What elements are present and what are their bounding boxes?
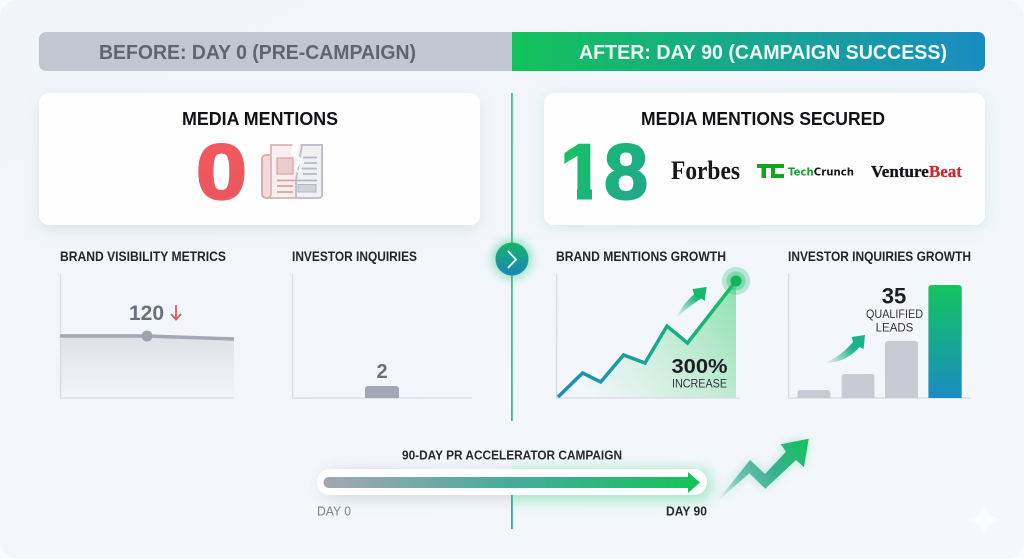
- heading: after: AFTER: DAY 90 (CAMPAIGN SUCCESS): [579, 42, 947, 64]
- icon: torn newspaper: [262, 144, 322, 198]
- label increase: INCREASE: [672, 376, 727, 390]
- label qualified leads: LEADS: [876, 322, 914, 334]
- chart heading: BRAND MENTIONS GROWTH: [556, 249, 726, 264]
- label day 90: DAY 90: [666, 504, 707, 518]
- big number zero: 0: [196, 128, 247, 216]
- arrow: rising zigzag: [717, 439, 809, 502]
- logo: Forbes: Forbes: [671, 156, 740, 185]
- heading: after: [512, 32, 985, 71]
- chart: brand mentions growth: [556, 249, 750, 398]
- icon: down arrow: [171, 305, 181, 320]
- panel: media mentions after: [544, 93, 985, 225]
- value 120: 120: [129, 302, 164, 325]
- chart: brand visibility metrics: [60, 249, 234, 398]
- arrow: leads growth: [824, 335, 865, 363]
- heading: before: BEFORE: DAY 0 (PRE-CAMPAIGN): [99, 42, 416, 64]
- chart: investor inquiries growth: [788, 249, 971, 398]
- logo: TechCrunch: [757, 164, 854, 178]
- heading: before: [39, 32, 512, 71]
- card heading: MEDIA MENTIONS: [182, 109, 338, 129]
- chart: investor inquiries: [292, 249, 472, 398]
- center divider line: [511, 93, 513, 421]
- icon: sparkle watermark: [965, 502, 1002, 537]
- chart heading: BRAND VISIBILITY METRICS: [60, 249, 226, 264]
- chart heading: INVESTOR INQUIRIES GROWTH: [788, 249, 971, 264]
- card heading: MEDIA MENTIONS SECURED: [641, 109, 885, 129]
- label qualified leads: QUALIFIED: [866, 309, 923, 321]
- bar: [365, 386, 399, 398]
- value 2: 2: [376, 361, 388, 383]
- value 35: 35: [882, 284, 906, 308]
- logo: TechCrunch: TechCrunch: [788, 166, 854, 178]
- chart heading: INVESTOR INQUIRIES: [292, 249, 417, 264]
- arrow: timeline progress: [324, 472, 700, 493]
- campaign timeline: [317, 448, 712, 529]
- panel: media mentions before: [39, 93, 480, 225]
- timeline heading: 90-DAY PR ACCELERATOR CAMPAIGN: [402, 448, 622, 462]
- peak marker: [722, 267, 750, 295]
- bars: [798, 285, 962, 398]
- arrow: growth: [676, 287, 707, 318]
- label qualified leads: [866, 309, 923, 334]
- header band: [39, 32, 985, 71]
- label day 0: DAY 0: [317, 504, 351, 518]
- icon: transition chevron button: [493, 240, 531, 278]
- value 300%: 300%: [672, 355, 728, 378]
- big number eighteen: 18: [560, 128, 648, 216]
- logo: VentureBeat: VentureBeat: [871, 162, 962, 181]
